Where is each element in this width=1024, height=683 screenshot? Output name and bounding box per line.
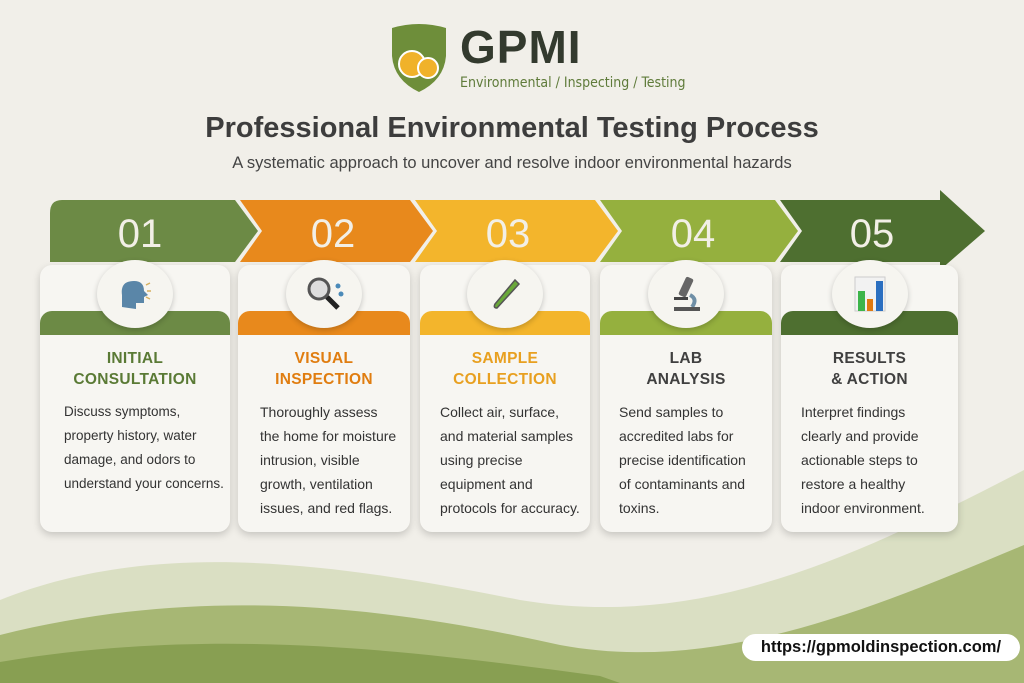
panel: initial consultation: CONSULTATION — [73, 371, 197, 388]
panel: visual inspection: Thoroughly assess — [260, 404, 378, 420]
panel: initial consultation: Discuss symptoms, — [64, 404, 180, 419]
panel: initial consultation — [40, 265, 230, 532]
panel: visual inspection: the home for moisture — [260, 428, 396, 444]
url badge — [742, 634, 1020, 661]
subtitle: A systematic approach to uncover and resolve indoor environmental hazards — [232, 154, 792, 172]
panel: results & action — [781, 265, 958, 532]
panel: results & action: restore a healthy — [801, 476, 905, 492]
panel: visual inspection: VISUAL — [295, 350, 353, 367]
panel: initial consultation: property history, water — [64, 428, 197, 443]
icon: magnifier — [286, 260, 362, 328]
process arrow band: 01 — [118, 212, 162, 256]
process arrow band — [50, 190, 985, 265]
panel: visual inspection: INSPECTION — [275, 371, 373, 388]
panel: visual inspection: growth, ventilation — [260, 476, 373, 492]
panel: results & action: RESULTS — [833, 350, 906, 367]
icon: microscope — [648, 260, 724, 328]
panel: initial consultation: INITIAL — [107, 350, 163, 367]
icon: bar chart — [832, 260, 908, 328]
panel: results & action: & ACTION — [831, 371, 908, 388]
title: Professional Environmental Testing Process — [205, 112, 819, 144]
panel: lab analysis: toxins. — [619, 500, 659, 516]
panel: results & action: actionable steps to — [801, 452, 918, 468]
panel: results & action: Interpret findings — [801, 404, 905, 420]
panel: sample collection: Collect air, surface, — [440, 404, 559, 420]
panel: sample collection — [420, 265, 590, 532]
icon: speaking head — [97, 260, 173, 328]
panel: visual inspection — [238, 265, 410, 532]
process arrow band: 04 — [671, 212, 715, 256]
panel: lab analysis — [600, 265, 772, 532]
panel: sample collection: using precise — [440, 452, 522, 468]
panel: lab analysis: LAB — [670, 350, 702, 367]
panel: visual inspection: issues, and red flags. — [260, 500, 392, 516]
process arrow band: 05 — [850, 212, 894, 256]
panel: lab analysis: ANALYSIS — [646, 371, 726, 388]
panel: sample collection: protocols for accuracy. — [440, 500, 580, 516]
panel: sample collection: and material samples — [440, 428, 573, 444]
panel: lab analysis: accredited labs for — [619, 428, 733, 444]
panel: initial consultation: damage, and odors to — [64, 452, 195, 467]
panel: sample collection: SAMPLE — [472, 350, 538, 367]
panel: results & action: clearly and provide — [801, 428, 919, 444]
url badge: https://gpmoldinspection.com/ — [761, 638, 1001, 656]
panel: lab analysis: of contaminants and — [619, 476, 745, 492]
tagline: Environmental / Inspecting / Testing — [460, 75, 686, 91]
panel: lab analysis: Send samples to — [619, 404, 723, 420]
brand name: GPMI — [460, 21, 582, 73]
panel: sample collection: equipment and — [440, 476, 533, 492]
panel: results & action: indoor environment. — [801, 500, 925, 516]
icon: shield — [392, 24, 446, 92]
panel: lab analysis: precise identification — [619, 452, 746, 468]
process arrow band: 03 — [486, 212, 530, 256]
logo — [392, 21, 686, 92]
icon: test tube — [467, 260, 543, 328]
panel: visual inspection: intrusion, visible — [260, 452, 360, 468]
process arrow band: 02 — [311, 212, 355, 256]
panel: initial consultation: understand your concerns. — [64, 476, 224, 491]
panel: sample collection: COLLECTION — [453, 371, 557, 388]
